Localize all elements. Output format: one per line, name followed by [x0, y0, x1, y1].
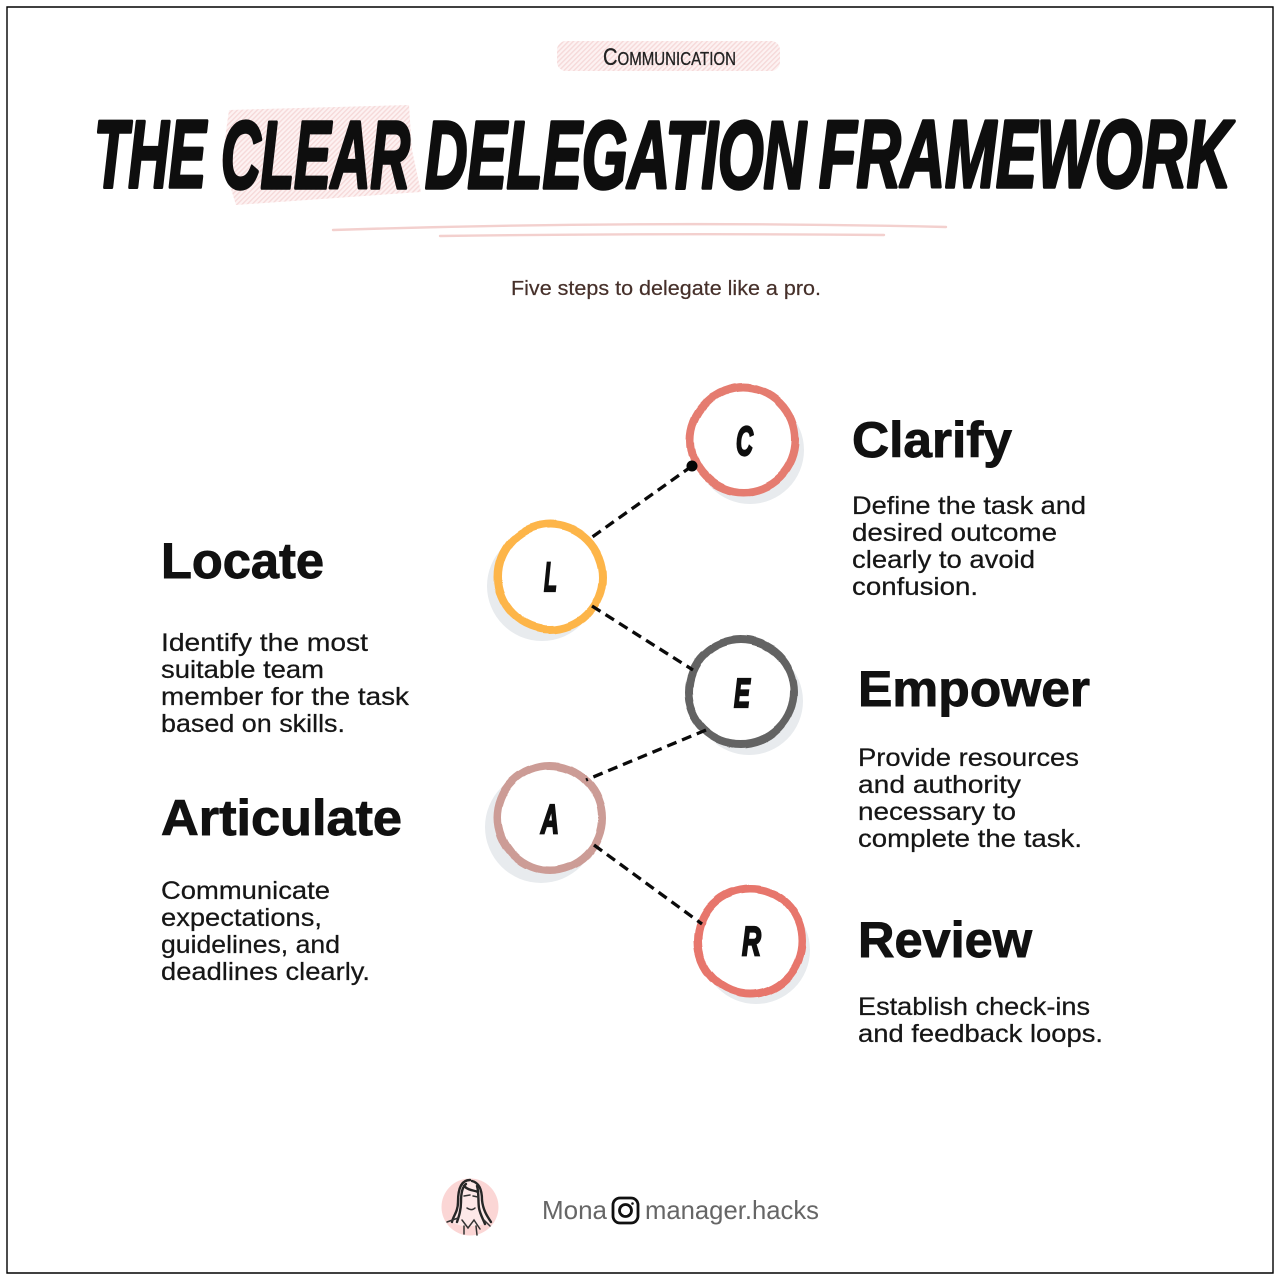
step: Empower: and authority	[858, 771, 1022, 799]
step: Articulate: Articulate	[161, 790, 402, 846]
title underline strokes	[333, 224, 946, 236]
node R: R	[742, 918, 761, 964]
title: THE	[94, 101, 208, 208]
step: Empower: necessary to	[858, 798, 1016, 826]
step: Articulate: guidelines, and	[161, 931, 340, 959]
node E	[688, 640, 803, 755]
step: Review: Establish check-ins	[858, 993, 1090, 1021]
author name: Mona	[542, 1195, 608, 1225]
step: Empower	[858, 661, 1090, 853]
step: Clarify	[852, 412, 1086, 601]
node R	[698, 888, 810, 1004]
subtitle: Five steps to delegate like a pro.	[511, 277, 821, 300]
node C	[690, 388, 804, 504]
step: Clarify: clearly to avoid	[852, 546, 1035, 574]
node L: L	[544, 554, 557, 600]
node E: E	[734, 670, 751, 716]
step: Clarify: desired outcome	[852, 519, 1057, 547]
category tag	[557, 41, 780, 71]
step: Articulate: deadlines clearly.	[161, 958, 370, 986]
step: Locate: based on skills.	[161, 710, 345, 738]
step: Articulate: Communicate	[161, 877, 330, 905]
step: Review: and feedback loops.	[858, 1020, 1103, 1048]
step: Empower: Empower	[858, 661, 1090, 717]
step: Locate: suitable team	[161, 656, 324, 684]
node C: C	[736, 418, 754, 464]
author avatar	[442, 1178, 498, 1236]
step: Articulate: expectations,	[161, 904, 322, 932]
step: Locate: Locate	[161, 533, 324, 589]
title: CLEAR	[221, 102, 410, 209]
node L	[487, 524, 602, 641]
title: DELEGATION	[425, 102, 807, 209]
connector lines	[586, 466, 706, 924]
step: Review	[858, 912, 1103, 1048]
category tag: COMMUNICATION	[603, 44, 736, 71]
step: Review: Review	[858, 912, 1032, 968]
title highlight: CLEAR	[222, 105, 421, 205]
node A	[485, 766, 602, 883]
step: Empower: Provide resources	[858, 744, 1079, 772]
step: Articulate	[161, 790, 402, 986]
step: Locate: Identify the most	[161, 629, 368, 657]
step: Locate	[161, 533, 410, 738]
author handle: manager.hacks	[645, 1195, 819, 1225]
node A: A	[540, 796, 559, 842]
step: Clarify: Clarify	[852, 412, 1012, 468]
connector dot	[686, 460, 698, 472]
step: Locate: member for the task	[161, 683, 410, 711]
step: Clarify: confusion.	[852, 573, 978, 601]
step: Clarify: Define the task and	[852, 492, 1086, 520]
icon: instagram	[613, 1198, 638, 1223]
step: Empower: complete the task.	[858, 825, 1082, 853]
title	[94, 101, 1235, 209]
